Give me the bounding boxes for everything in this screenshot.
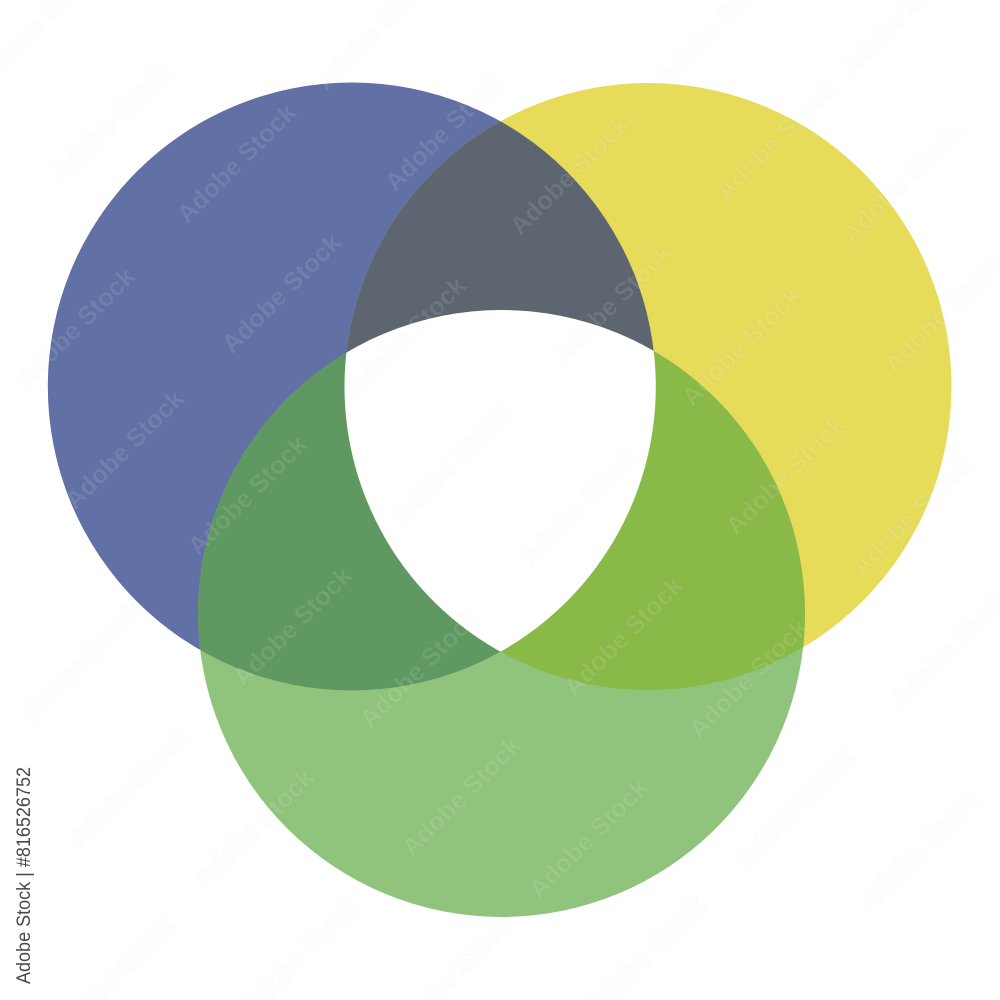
stock watermarks: Adobe Stock [524,773,654,904]
stock watermarks: Adobe Stock [172,98,302,229]
stock watermarks: Adobe Stock [515,441,645,572]
stock watermarks: Adobe Stock [855,784,985,915]
stock watermarks: Adobe Stock [342,271,472,402]
stock watermarks: Adobe Stock [847,451,977,582]
stock watermarks: Adobe Stock [559,571,689,702]
stock watermarks: Adobe Stock [397,731,527,862]
stock watermarks: Adobe Stock [228,561,358,692]
stock watermarks: Adobe Stock [217,228,347,359]
stock watermarks: Adobe Stock [721,410,851,541]
overlap: blue and yellow [346,122,654,352]
stock watermarks: Adobe Stock [677,281,807,412]
center: triple overlap [344,310,656,652]
circle: blue [48,82,656,690]
stock watermarks: Adobe Stock [386,399,516,530]
stock watermarks: Adobe Stock [190,763,320,894]
circle: green [198,310,805,917]
stock watermarks: Adobe Stock [505,110,635,241]
venn diagram [48,82,952,917]
stock watermarks: Adobe Stock [837,118,967,249]
overlap: yellow and green [344,310,805,690]
circle: yellow [344,83,952,690]
stock watermarks: Adobe Stock [380,66,510,197]
stock watermarks: Adobe Stock [548,238,678,369]
stock watermarks: Adobe Stock [684,613,814,744]
stock watermarks: Adobe Stock [46,57,176,188]
stock watermarks: Adobe Stock [711,75,841,206]
overlap: blue and green [198,350,652,690]
stock watermarks: Adobe Stock [355,603,485,734]
stock watermarks: Adobe Stock [18,596,148,727]
stock watermarks: Adobe Stock [183,430,313,561]
stock watermarks: Adobe Stock [731,741,861,872]
stock watermarks: Adobe Stock [11,262,141,393]
stock watermarks: Adobe Stock [60,384,190,515]
vertical stock id text: Adobe Stock | #816526752 [14,767,35,984]
stock watermarks: Adobe Stock [64,723,194,854]
